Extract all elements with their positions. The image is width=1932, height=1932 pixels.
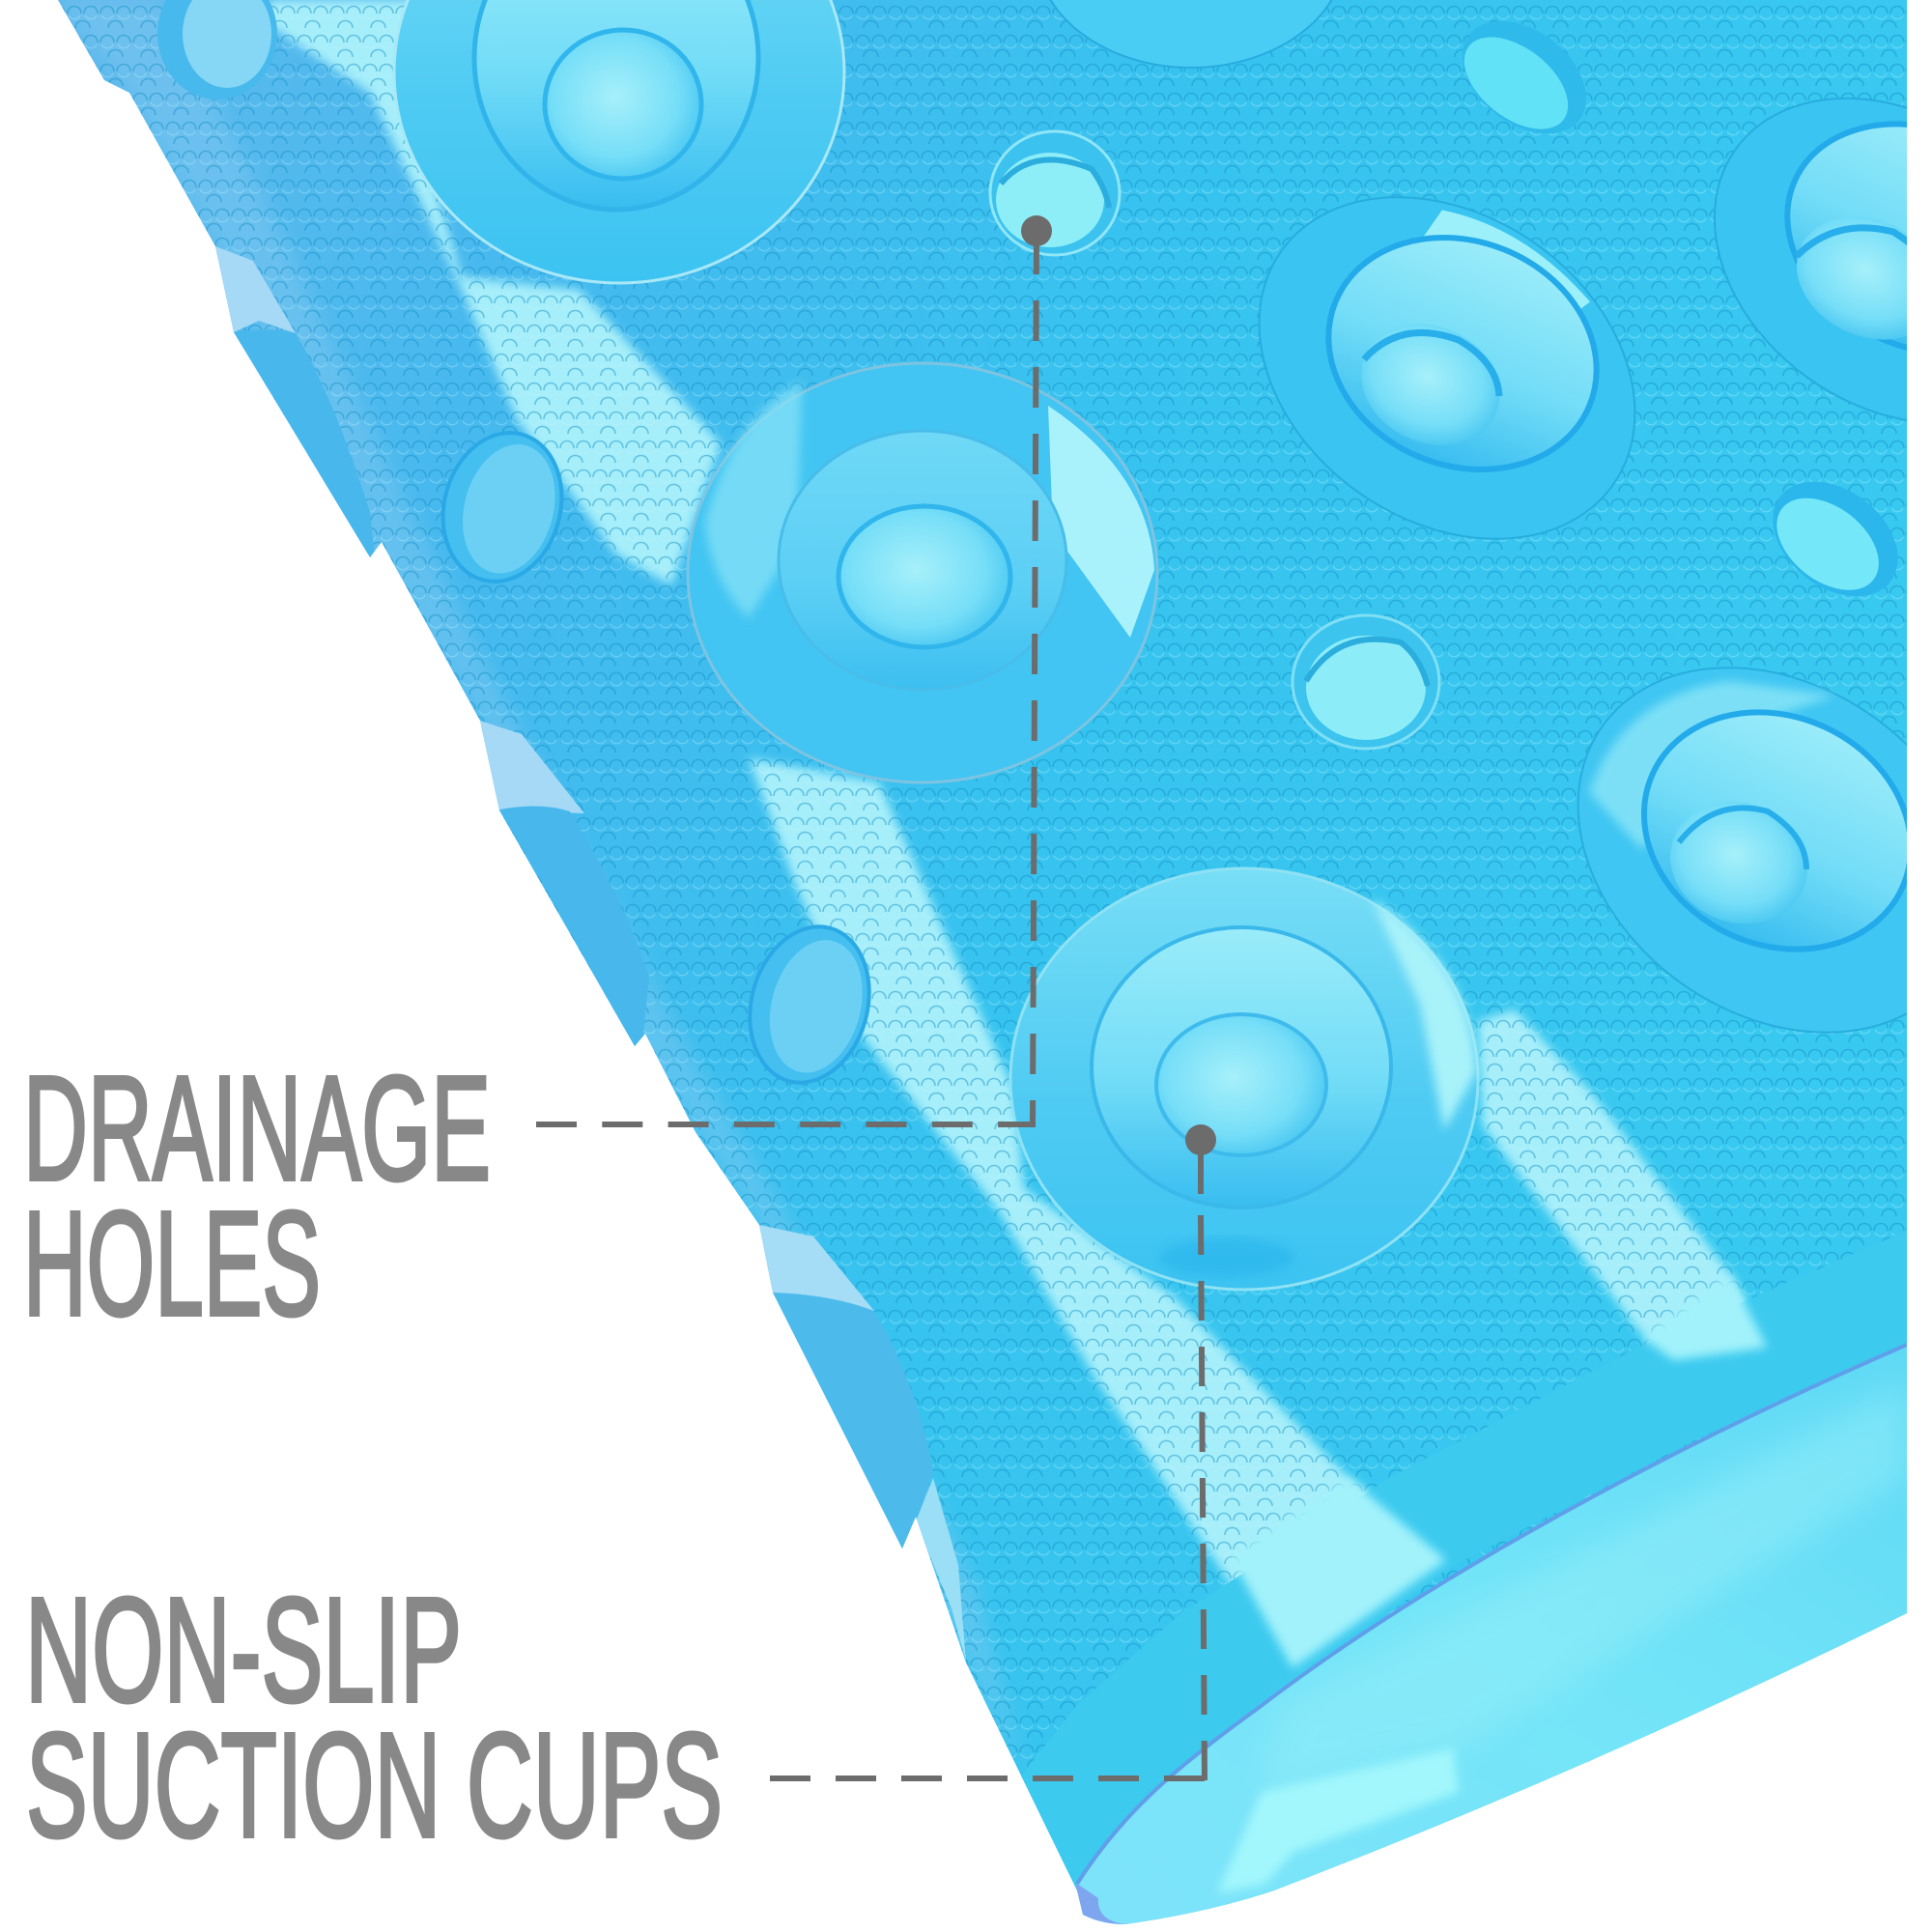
rim of mat <box>1075 1345 1907 1924</box>
side suction cup 2 <box>480 721 649 1046</box>
suction cup D <box>1652 31 1932 491</box>
drainage hole right <box>1774 481 1897 597</box>
rim reflection <box>1217 1748 1459 1893</box>
leader: suction cups <box>770 1124 1216 1781</box>
suction cup E <box>1508 592 1932 1108</box>
suction cup B <box>688 363 1157 782</box>
suction cup A <box>394 0 844 283</box>
horizontal dashes <box>536 1122 1036 1127</box>
label: non-slip suction cups <box>25 1567 723 1868</box>
vertical dashes <box>1201 1215 1205 1781</box>
rim corner <box>1075 1884 1125 1924</box>
rim patterned glow <box>1256 1381 1907 1797</box>
label line 2: HOLES <box>23 1180 321 1347</box>
leader dot <box>1021 215 1052 246</box>
leader: drainage holes <box>536 215 1052 1124</box>
drainage hole left 1 <box>440 431 564 583</box>
drainage hole top right <box>1463 21 1586 133</box>
suction cup C <box>1193 127 1701 610</box>
leader dot <box>1185 1124 1216 1155</box>
drainage hole center <box>1293 615 1439 749</box>
drainage hole top left <box>157 0 277 99</box>
horizontal dashes <box>770 1776 1208 1781</box>
side suction cup 1 <box>215 246 375 557</box>
mat edge tint <box>58 0 1024 1777</box>
rim edge <box>1077 1345 1907 1884</box>
band reflections <box>1231 1274 1767 1668</box>
label line 1: NON-SLIP <box>25 1567 462 1733</box>
drainage hole indicated <box>990 131 1120 255</box>
label line 2: SUCTION CUPS <box>26 1702 723 1868</box>
suction cup C dome <box>1293 198 1632 509</box>
vertical dashes <box>1033 234 1037 1123</box>
top stem <box>1198 1140 1204 1194</box>
drainage hole left 2 <box>748 924 871 1085</box>
suction cup top center <box>1037 0 1346 68</box>
label: drainage holes <box>23 1045 491 1347</box>
smooth band above rim <box>1005 1231 1907 1893</box>
side suction cup 3 <box>759 1225 966 1662</box>
suction cup F <box>1010 868 1478 1290</box>
pale light reflections <box>261 0 1767 1668</box>
label line 1: DRAINAGE <box>23 1045 491 1211</box>
